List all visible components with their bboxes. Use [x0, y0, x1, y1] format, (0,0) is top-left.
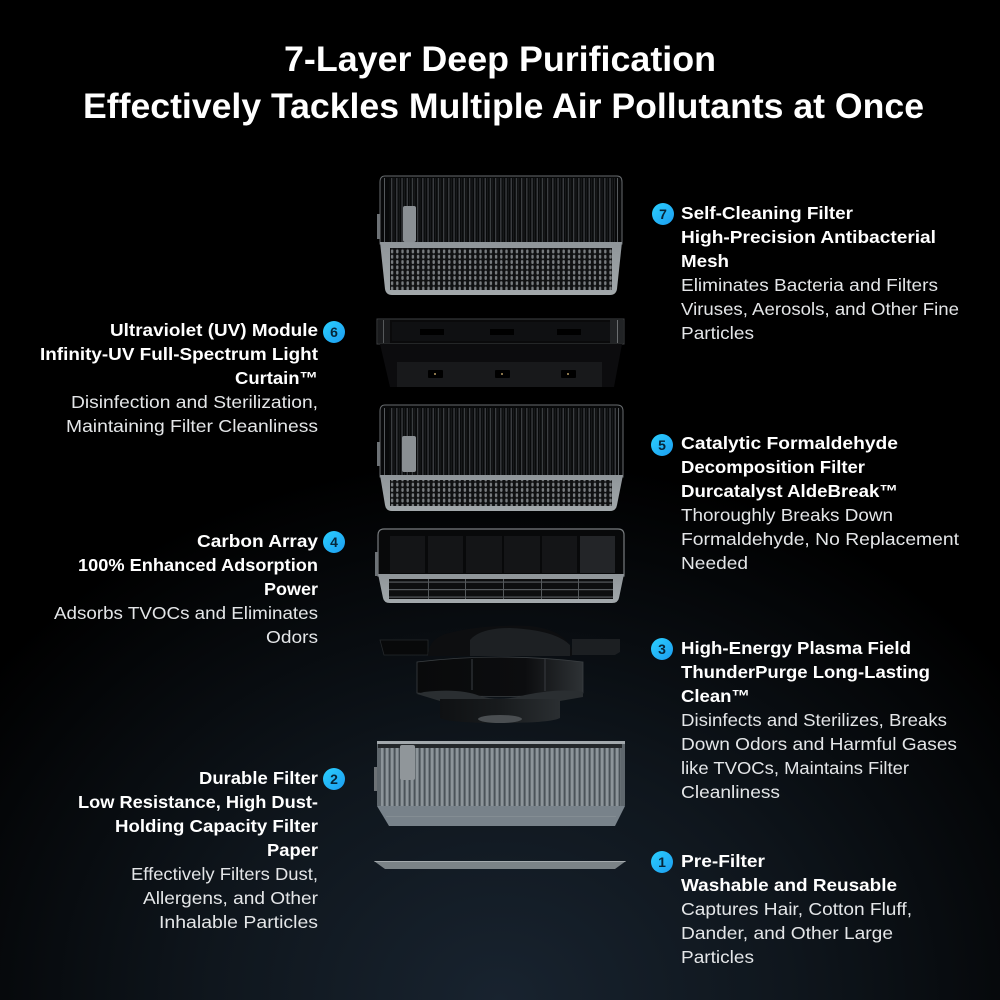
callout 5 text: Durcatalyst AldeBreak™ [681, 481, 898, 501]
callout 7 text: Particles [681, 323, 754, 343]
callout 2 text: Holding Capacity Filter [115, 816, 318, 836]
callout 6 text: Disinfection and Sterilization, [71, 392, 318, 412]
callout 7 text [681, 203, 959, 343]
callout 4 text: Carbon Array [197, 531, 318, 551]
badge 4: 4 [330, 534, 338, 550]
title [83, 40, 924, 126]
callout 4 text: Adsorbs TVOCs and Eliminates [54, 603, 318, 623]
callout 4 text [54, 531, 318, 647]
layer 4: carbon array illustration [375, 529, 624, 603]
callout 3 text [681, 638, 957, 802]
callout 6 text: Maintaining Filter Cleanliness [66, 416, 318, 436]
callout 2 text: Allergens, and Other [143, 888, 318, 908]
callout 4 [54, 531, 345, 647]
callout 5 [651, 433, 959, 573]
callout 7 text: Self-Cleaning Filter [681, 203, 853, 223]
layer 6: UV module illustration [377, 319, 624, 387]
callout 2 text [78, 768, 318, 932]
callout 1 text: Captures Hair, Cotton Fluff, [681, 899, 912, 919]
badge 6 [323, 321, 345, 343]
badge 5 [651, 434, 673, 456]
callout 1 text [681, 851, 912, 967]
callout 2 [78, 768, 345, 932]
callout 1 text: Dander, and Other Large [681, 923, 893, 943]
callout 6 text [40, 320, 318, 436]
layer 2: durable filter illustration [374, 741, 625, 826]
callout 3 text: Clean™ [681, 686, 750, 706]
callout 4 text: Power [264, 579, 318, 599]
callout 3 text: like TVOCs, Maintains Filter [681, 758, 909, 778]
badge 2 [323, 768, 345, 790]
layer 1: pre-filter illustration [374, 861, 626, 869]
callout 6 text: Curtain™ [235, 368, 318, 388]
title: 7-Layer Deep Purification [284, 40, 716, 79]
badge 6: 6 [330, 324, 338, 340]
badge 5: 5 [658, 437, 666, 453]
callout 7 text: Viruses, Aerosols, and Other Fine [681, 299, 959, 319]
badge 1 [651, 851, 673, 873]
callout 6 text: Infinity-UV Full-Spectrum Light [40, 344, 318, 364]
callout 7 text: High-Precision Antibacterial [681, 227, 936, 247]
callout 2 text: Inhalable Particles [159, 912, 318, 932]
callout 5 text: Needed [681, 553, 748, 573]
callout 3 text: Disinfects and Sterilizes, Breaks [681, 710, 947, 730]
callout 5 text: Decomposition Filter [681, 457, 865, 477]
badge 2: 2 [330, 771, 338, 787]
callout 7 [652, 203, 959, 343]
callout 7 text: Eliminates Bacteria and Filters [681, 275, 938, 295]
pull tab [403, 206, 416, 242]
callout 3 [651, 638, 957, 802]
callout 6 [40, 320, 345, 436]
callout 6 text: Ultraviolet (UV) Module [110, 320, 318, 340]
callout 5 text: Catalytic Formaldehyde [681, 433, 898, 453]
callout 5 text: Formaldehyde, No Replacement [681, 529, 959, 549]
badge 3: 3 [658, 641, 666, 657]
callout 1 text: Washable and Reusable [681, 875, 897, 895]
callout 2 text: Durable Filter [199, 768, 318, 788]
layer 5: formaldehyde filter illustration [377, 405, 623, 511]
badge 4 [323, 531, 345, 553]
callout 1 text: Particles [681, 947, 754, 967]
title: Effectively Tackles Multiple Air Pollutants at Once [83, 87, 924, 126]
callout 1 text: Pre-Filter [681, 851, 765, 871]
pull tab [402, 436, 416, 472]
callout 2 text: Low Resistance, High Dust- [78, 792, 318, 812]
callout 3 text: High-Energy Plasma Field [681, 638, 911, 658]
badge 7: 7 [659, 206, 667, 222]
callout 4 text: Odors [266, 627, 318, 647]
badge 7 [652, 203, 674, 225]
callout 7 text: Mesh [681, 251, 729, 271]
layer 7: self-cleaning filter illustration [377, 176, 622, 295]
badge 3 [651, 638, 673, 660]
callout 5 text [681, 433, 959, 573]
callout 2 text: Effectively Filters Dust, [131, 864, 318, 884]
layer 3: plasma field fan illustration [380, 626, 620, 723]
callout 2 text: Paper [267, 840, 318, 860]
callout 4 text: 100% Enhanced Adsorption [78, 555, 318, 575]
callout 1 [651, 851, 912, 967]
callout 3 text: Down Odors and Harmful Gases [681, 734, 957, 754]
callout 3 text: ThunderPurge Long-Lasting [681, 662, 930, 682]
badge 1: 1 [658, 854, 666, 870]
pull tab [400, 745, 415, 780]
callout 3 text: Cleanliness [681, 782, 780, 802]
callout 5 text: Thoroughly Breaks Down [681, 505, 893, 525]
